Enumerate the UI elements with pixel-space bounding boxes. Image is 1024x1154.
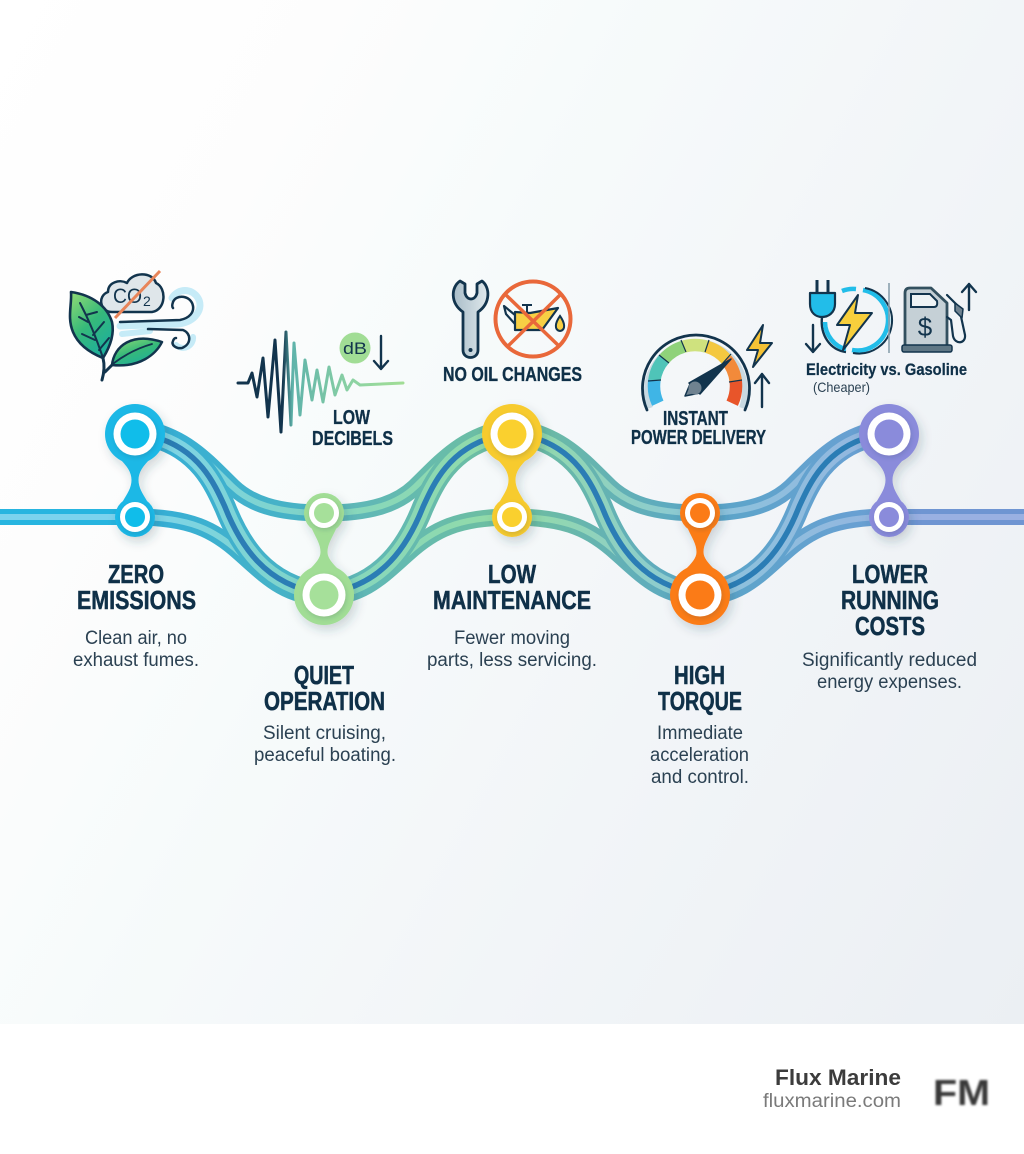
text: quiet operation: QUIET — [294, 660, 354, 690]
text: lower running costs: COSTS — [855, 611, 925, 641]
icon label: electricity vs gasoline — [806, 360, 967, 395]
icon: sound wave with dB: dB — [343, 339, 367, 358]
text: zero emissions: exhaust fumes. — [73, 650, 199, 671]
text: high torque: HIGH — [674, 660, 725, 690]
text: zero emissions: ZERO — [108, 559, 164, 589]
text: quiet operation: Silent cruising, — [263, 723, 386, 744]
node: high torque — [670, 493, 730, 625]
text: quiet operation — [254, 660, 396, 766]
track segment 4 — [700, 430, 889, 597]
icon: leaves, CO2 cloud and wind: 2 — [143, 293, 151, 309]
icon label: no oil changes: NO OIL CHANGES — [443, 364, 582, 386]
node: zero emissions — [105, 404, 165, 537]
text: low maintenance: Fewer moving — [454, 628, 570, 649]
footer brand text: Flux Marine — [775, 1065, 901, 1090]
text: zero emissions — [73, 559, 199, 671]
node: lower running costs — [859, 404, 919, 537]
footer brand text: fluxmarine.com — [763, 1091, 901, 1112]
right track stub — [885, 509, 1024, 525]
text: low maintenance — [427, 559, 597, 671]
node: low maintenance — [482, 404, 542, 537]
icon: leaves, CO2 cloud and wind: CO — [113, 285, 142, 308]
icon: electricity versus gasoline — [806, 280, 976, 354]
icon label: electricity vs gasoline: (Cheaper) — [813, 379, 870, 395]
text: high torque: TORQUE — [658, 686, 742, 716]
icon label: low decibels — [312, 407, 393, 450]
text: quiet operation: OPERATION — [264, 686, 385, 716]
node: quiet operation — [294, 493, 354, 625]
text: zero emissions: Clean air, no — [85, 628, 187, 649]
icon label: electricity vs gasoline: Electricity vs. Gasoline — [806, 360, 967, 379]
footer logo: FM — [933, 1072, 990, 1113]
text: zero emissions: EMISSIONS — [77, 585, 196, 615]
left track stub — [0, 509, 140, 525]
icon: electricity versus gasoline: $ — [918, 312, 933, 342]
icon label: instant power delivery: POWER DELIVERY — [631, 427, 766, 449]
track segment 3 — [512, 430, 701, 597]
icon: leaves, CO2 cloud and wind — [70, 271, 200, 380]
text: high torque: Immediate — [657, 723, 743, 744]
icon label: instant power delivery: INSTANT — [663, 408, 728, 430]
text: low maintenance: MAINTENANCE — [433, 585, 591, 615]
icon label: low decibels: DECIBELS — [312, 428, 393, 450]
text: low maintenance: LOW — [488, 559, 536, 589]
track segment 2 — [324, 430, 513, 597]
text: lower running costs: LOWER — [852, 559, 928, 589]
text: lower running costs: Significantly reduced — [802, 650, 977, 671]
footer brand text — [763, 1065, 901, 1112]
icon label: low decibels: LOW — [333, 407, 370, 429]
text: high torque: acceleration — [650, 745, 749, 766]
text: lower running costs: energy expenses. — [817, 672, 962, 693]
track segment 1 — [135, 430, 324, 597]
icon: sound wave with dB — [238, 332, 403, 432]
icon: wrench and no-oil sign — [453, 281, 570, 358]
icon label: instant power delivery — [631, 408, 766, 449]
text: lower running costs: RUNNING — [841, 585, 939, 615]
footer band — [0, 1024, 1024, 1154]
text: high torque: and control. — [651, 767, 749, 788]
icon: power gauge with bolt and arrow — [642, 325, 772, 410]
text: lower running costs — [802, 559, 977, 693]
text: quiet operation: peaceful boating. — [254, 745, 396, 766]
text: low maintenance: parts, less servicing. — [427, 650, 597, 671]
text: high torque — [650, 660, 749, 788]
